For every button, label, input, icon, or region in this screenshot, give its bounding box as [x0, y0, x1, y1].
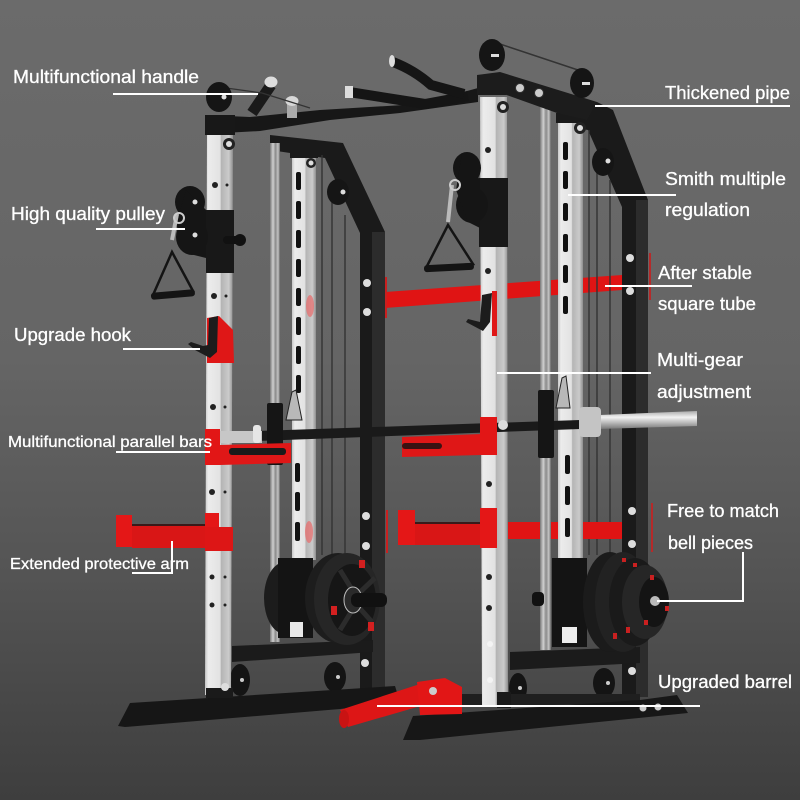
label: multifunctional parallel bars: Multifunctional parallel bars — [8, 434, 212, 451]
right guide rod — [540, 107, 551, 650]
left front post — [205, 115, 235, 698]
rear slotted post: left — [290, 150, 318, 560]
left guide rod — [270, 143, 280, 642]
right floor base — [403, 695, 688, 740]
label: upgraded barrel: Upgraded barrel — [658, 672, 792, 692]
base bolts — [640, 704, 662, 712]
red landmine barrel — [339, 678, 462, 728]
label: extended protective arm: Extended protective arm — [10, 556, 189, 573]
left pulley assembly and handle — [151, 186, 246, 300]
bolts on right top block — [516, 84, 544, 98]
label: thickened pipe: Thickened pipe — [665, 83, 790, 103]
rear arch: left side — [270, 135, 385, 690]
rear bottom pulleys — [230, 662, 615, 703]
left cross member — [232, 640, 373, 662]
right upgrade hook — [466, 291, 497, 336]
label: after stable square tube: After stable — [658, 263, 752, 283]
pulley axles — [240, 675, 610, 690]
rear slotted post: right — [556, 113, 622, 562]
right protective arm — [398, 508, 497, 548]
label: free to match bell pieces — [657, 501, 779, 601]
label: after stable square tube — [605, 263, 756, 314]
label: multi-gear adjustment — [497, 350, 751, 402]
left floor base — [118, 686, 400, 727]
label: smith multiple regulation: regulation — [665, 200, 750, 220]
label: free to match bell pieces: bell pieces — [668, 533, 753, 553]
right cables — [589, 130, 610, 555]
label: smith multiple regulation — [568, 169, 786, 220]
multifunctional handles — [252, 55, 468, 118]
label: after stable square tube: square tube — [658, 294, 756, 314]
left cables — [322, 155, 345, 555]
left protective arm — [116, 513, 233, 551]
rear pulley: right — [592, 148, 614, 176]
label: multi-gear adjustment: Multi-gear — [657, 350, 743, 370]
rear pulley: left — [327, 179, 349, 205]
left upgrade hook — [188, 316, 234, 363]
label: high quality pulley: High quality pulley — [11, 204, 165, 224]
right top block — [477, 72, 597, 120]
top pulleys — [206, 39, 594, 112]
red rear band: upper — [385, 253, 651, 318]
machine illustration — [116, 39, 697, 740]
right floor rail — [462, 694, 640, 706]
main barbell — [220, 376, 697, 465]
label: multi-gear adjustment: adjustment — [657, 382, 751, 402]
label: upgrade hook: Upgrade hook — [14, 325, 132, 345]
red rear band: lower — [386, 503, 653, 553]
label: multifunctional handle: Multifunctional handle — [13, 67, 199, 87]
label: smith multiple regulation: Smith multiple — [665, 169, 786, 189]
rear arch: right side — [560, 102, 648, 697]
right parallel bar — [402, 417, 508, 457]
top beam — [205, 88, 478, 134]
label: free to match bell pieces: Free to match — [667, 501, 779, 521]
left parallel bar — [205, 429, 291, 465]
label: extended protective arm — [10, 541, 189, 573]
right cross member — [510, 647, 640, 670]
right pulley assembly and handle — [424, 152, 488, 272]
left weight stack — [264, 553, 387, 645]
right weight stack — [532, 552, 669, 652]
right front post — [477, 75, 511, 708]
